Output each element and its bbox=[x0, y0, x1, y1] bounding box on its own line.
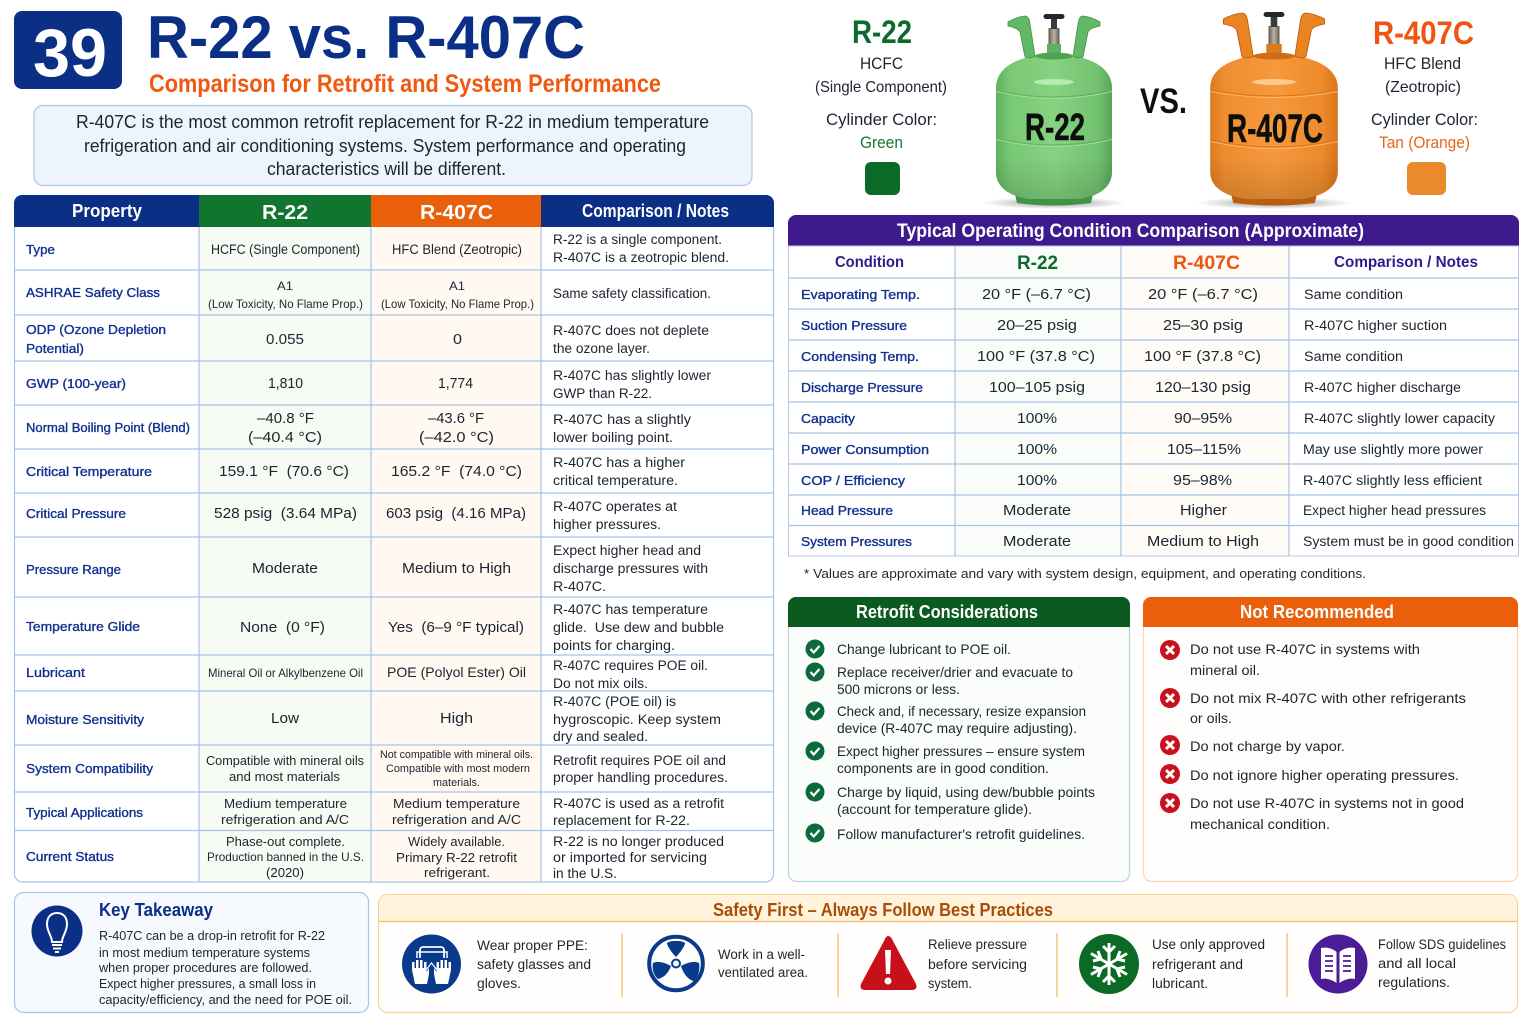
row: Current Status: Phase-out complete. bbox=[226, 834, 345, 849]
row: Typical Applications bbox=[26, 796, 724, 828]
number badge: 39 bbox=[33, 15, 107, 91]
intro callout: R-407C is the most common retrofit replacement for R-22 in medium temperature bbox=[76, 112, 709, 132]
checklist text: Check and, if necessary, resize expansion bbox=[837, 703, 1086, 719]
check icons bbox=[806, 640, 824, 842]
row: Type: HCFC (Single Component) bbox=[211, 242, 360, 257]
R-22 info block bbox=[815, 14, 947, 195]
row: Pressure Range: Pressure Range bbox=[26, 562, 121, 577]
list text: or oils. bbox=[1190, 710, 1232, 726]
row: Temperature Glide: glide. Use dew and bubble bbox=[553, 620, 724, 635]
R-407C info block: (Zeotropic) bbox=[1385, 79, 1461, 96]
row: Lubricant: Lubricant bbox=[26, 665, 85, 680]
row: System Pressures: System Pressures bbox=[801, 534, 913, 549]
list text: Do not ignore higher operating pressures. bbox=[1190, 767, 1459, 783]
row: Critical Pressure: higher pressures. bbox=[553, 517, 661, 532]
row: ODP: Potential) bbox=[26, 341, 84, 356]
row: Power Consumption: 100% bbox=[1017, 442, 1057, 458]
list text: Do not use R-407C in systems with bbox=[1190, 641, 1420, 657]
row: Condensing Temp.: Condensing Temp. bbox=[801, 349, 919, 364]
row: ODP: 0 bbox=[453, 332, 462, 348]
row: Type bbox=[26, 232, 729, 265]
intro callout: characteristics will be different. bbox=[267, 159, 506, 179]
table header: Property bbox=[72, 201, 142, 221]
row: Capacity: Capacity bbox=[801, 411, 856, 426]
R-407C info block: Cylinder Color: bbox=[1371, 111, 1478, 129]
row: Current Status: Widely available. bbox=[408, 834, 505, 849]
row: ODP: the ozone layer. bbox=[553, 341, 650, 356]
row: Moisture Sensitivity: R-407C (POE oil) is bbox=[553, 694, 676, 709]
R-22 info block: Cylinder Color: bbox=[826, 111, 937, 129]
row: Condensing Temp. bbox=[801, 349, 1403, 365]
row: Typical Applications: Typical Applications bbox=[26, 805, 144, 820]
row: GWP: R-407C has slightly lower bbox=[553, 368, 712, 383]
row: COP / Efficiency: 95–98% bbox=[1173, 473, 1232, 489]
text: SDS: regulations. bbox=[1378, 975, 1450, 990]
icon: snowflake bbox=[1079, 934, 1139, 994]
text: PPE: Wear proper PPE: bbox=[477, 938, 588, 953]
row: Type: R-22 is a single component. bbox=[553, 232, 722, 247]
row: ASHRAE Safety Class: A1 bbox=[277, 279, 293, 293]
row: Power Consumption: Power Consumption bbox=[801, 442, 929, 457]
row: Lubricant bbox=[26, 658, 708, 691]
text: ventilation: ventilated area. bbox=[718, 965, 808, 980]
intro callout: refrigeration and air conditioning systems. System performance and operating bbox=[84, 136, 686, 156]
text: PPE: gloves. bbox=[477, 976, 521, 991]
row: Condensing Temp.: 100 °F (37.8 °C) bbox=[977, 349, 1095, 365]
checklist text: 500 microns or less. bbox=[837, 681, 960, 697]
row: Critical Temperature bbox=[26, 455, 686, 488]
body text bbox=[98, 928, 352, 1007]
x icons bbox=[1160, 640, 1180, 813]
text: relieve pressure: Relieve pressure bbox=[928, 937, 1027, 952]
row: System Compatibility: System Compatibility bbox=[26, 761, 154, 776]
icon: PPE glasses and gloves bbox=[402, 934, 461, 994]
row: Head Pressure: Expect higher head pressures bbox=[1303, 503, 1486, 518]
row: Normal Boiling Point: lower boiling point. bbox=[553, 430, 673, 445]
row: Current Status: Primary R-22 retrofit bbox=[396, 850, 517, 865]
row: ASHRAE Safety Class: Same safety classification. bbox=[553, 286, 711, 301]
column headers: R-407C bbox=[1173, 253, 1240, 274]
row: Critical Pressure: 528 psig (3.64 MPa) bbox=[214, 506, 357, 522]
row: Typical Applications: replacement for R-22. bbox=[553, 813, 690, 828]
row: System Pressures: Moderate bbox=[1003, 534, 1071, 550]
row: Power Consumption: 105–115% bbox=[1167, 442, 1241, 458]
row: System Compatibility: Retrofit requires POE oil and bbox=[553, 753, 726, 768]
row: Capacity bbox=[801, 411, 1495, 427]
row: Suction Pressure: 25–30 psig bbox=[1163, 318, 1243, 334]
row: Normal Boiling Point: (–40.4 °C) bbox=[248, 430, 322, 446]
row: Head Pressure: Moderate bbox=[1003, 503, 1071, 519]
panel: operating conditions table bbox=[788, 215, 1519, 556]
panel: not recommended bbox=[1143, 597, 1518, 882]
icon: open book bbox=[1308, 934, 1368, 994]
text: relieve pressure bbox=[928, 937, 1027, 991]
row: Evaporating Temp.: 20 °F (–6.7 °C) bbox=[1148, 287, 1258, 303]
text: approved refrigerant: lubricant. bbox=[1152, 976, 1208, 991]
row: Lubricant: Do not mix oils. bbox=[553, 676, 648, 691]
row: System Pressures: System must be in good condition bbox=[1303, 534, 1514, 549]
body text: in most medium temperature systems bbox=[99, 945, 310, 960]
row: ODP: R-407C does not deplete bbox=[553, 323, 709, 338]
checklist text: Change lubricant to POE oil. bbox=[837, 641, 1011, 657]
checklist text: Charge by liquid, using dew/bubble points bbox=[837, 784, 1095, 800]
R-407C info block: HFC Blend bbox=[1384, 55, 1461, 73]
row: System Pressures bbox=[801, 534, 1514, 550]
row: Pressure Range bbox=[26, 543, 708, 594]
VS. label: VS. bbox=[1140, 82, 1187, 121]
intro callout bbox=[34, 106, 752, 186]
text: approved refrigerant: Use only approved bbox=[1152, 937, 1265, 952]
R-22 info block: HCFC bbox=[860, 55, 903, 73]
icon: light bulb bbox=[32, 906, 82, 956]
row: Current Status: Current Status bbox=[26, 849, 115, 864]
row: Pressure Range: discharge pressures with bbox=[553, 561, 708, 576]
checklist text: (account for temperature glide). bbox=[837, 801, 1032, 817]
R-22 info block: Green bbox=[860, 134, 903, 152]
row: Discharge Pressure: 120–130 psig bbox=[1155, 380, 1251, 396]
list text: Do not charge by vapor. bbox=[1190, 738, 1345, 754]
panel: property comparison table bbox=[14, 195, 774, 882]
title: R-22 vs. R-407C bbox=[147, 4, 585, 71]
row: Typical Applications: R-407C is used as a retrofit bbox=[553, 796, 724, 811]
row: Capacity: 100% bbox=[1017, 411, 1057, 427]
row: Suction Pressure bbox=[801, 318, 1447, 334]
body text: Expect higher pressures, a small loss in bbox=[99, 976, 316, 991]
text: ventilation: Work in a well- bbox=[718, 947, 805, 962]
row: Temperature Glide: points for charging. bbox=[553, 638, 675, 653]
checklist text bbox=[837, 641, 1095, 842]
text: approved refrigerant bbox=[1152, 937, 1265, 991]
row: ODP: ODP (Ozone Depletion bbox=[26, 322, 166, 337]
row: ASHRAE Safety Class: A1 bbox=[449, 279, 465, 293]
icon: ventilation fan bbox=[649, 937, 703, 990]
row: COP / Efficiency: COP / Efficiency bbox=[801, 473, 906, 488]
row: Pressure Range: R-407C. bbox=[553, 579, 606, 594]
list text: Do not use R-407C in systems not in good bbox=[1190, 795, 1464, 811]
row: Evaporating Temp.: Same condition bbox=[1304, 287, 1403, 302]
row: Head Pressure: Head Pressure bbox=[801, 503, 893, 518]
row: GWP: GWP (100-year) bbox=[26, 376, 126, 391]
checklist text: Follow manufacturer's retrofit guidelines. bbox=[837, 826, 1085, 842]
row: Current Status: refrigerant. bbox=[424, 865, 490, 880]
row: Type: R-407C is a zeotropic blend. bbox=[553, 250, 729, 265]
row: ODP bbox=[26, 322, 709, 356]
row: GWP bbox=[26, 368, 712, 401]
row: Current Status bbox=[26, 834, 724, 881]
row: Moisture Sensitivity: dry and sealed. bbox=[553, 729, 648, 744]
row: Discharge Pressure: R-407C higher discharge bbox=[1304, 380, 1461, 395]
row: Critical Pressure: R-407C operates at bbox=[553, 499, 677, 514]
row: Suction Pressure: 20–25 psig bbox=[997, 318, 1077, 334]
row: Pressure Range: Medium to High bbox=[402, 561, 511, 577]
row: COP / Efficiency: 100% bbox=[1017, 473, 1057, 489]
row: GWP: 1,810 bbox=[268, 376, 303, 392]
text: approved refrigerant: refrigerant and bbox=[1152, 957, 1243, 972]
row: Critical Temperature: R-407C has a higher bbox=[553, 455, 686, 470]
text: relieve pressure: before servicing bbox=[928, 957, 1027, 972]
text: SDS: and all local bbox=[1378, 956, 1456, 971]
row: Evaporating Temp.: 20 °F (–6.7 °C) bbox=[982, 287, 1091, 303]
row: Power Consumption: May use slightly more power bbox=[1303, 442, 1484, 457]
row: Lubricant: Mineral Oil or Alkylbenzene Oil bbox=[208, 666, 363, 680]
row: Normal Boiling Point: –40.8 °F bbox=[257, 411, 314, 427]
row: COP / Efficiency: R-407C slightly less efficient bbox=[1303, 473, 1482, 488]
table header: R-407C bbox=[420, 202, 493, 224]
table header bbox=[14, 195, 774, 227]
subtitle: Comparison for Retrofit and System Performance bbox=[149, 70, 661, 98]
heading: Retrofit Considerations bbox=[856, 602, 1038, 622]
row: Normal Boiling Point bbox=[26, 411, 691, 446]
row: COP / Efficiency bbox=[801, 473, 1482, 489]
row: Moisture Sensitivity bbox=[26, 694, 721, 744]
row: Capacity: R-407C slightly lower capacity bbox=[1304, 411, 1495, 426]
row: Critical Pressure: 603 psig (4.16 MPa) bbox=[386, 506, 526, 522]
row: Temperature Glide: None (0 °F) bbox=[240, 620, 325, 636]
text: PPE bbox=[477, 938, 591, 991]
row: Lubricant: R-407C requires POE oil. bbox=[553, 658, 708, 673]
row: Temperature Glide: Temperature Glide bbox=[26, 619, 140, 634]
checklist text: Replace receiver/drier and evacuate to bbox=[837, 664, 1073, 680]
panel: safety first bbox=[378, 894, 1518, 1012]
row: System Compatibility bbox=[26, 749, 728, 789]
R-22 info block: (Single Component) bbox=[815, 79, 947, 96]
row: Typical Applications: refrigeration and A/C bbox=[221, 812, 349, 827]
row: System Compatibility: proper handling procedures. bbox=[553, 770, 728, 785]
R-407C info block: Tan (Orange) bbox=[1379, 134, 1470, 152]
table header: Comparison / Notes bbox=[582, 201, 729, 221]
row: Temperature Glide: Yes (6–9 °F typical) bbox=[388, 620, 524, 636]
list text bbox=[1190, 641, 1466, 832]
row: Typical Applications: refrigeration and A/C bbox=[392, 812, 521, 827]
panel: key takeaway bbox=[14, 892, 368, 1012]
row: System Pressures: Medium to High bbox=[1147, 534, 1259, 550]
row: Discharge Pressure bbox=[801, 380, 1461, 396]
row: Normal Boiling Point: (–42.0 °C) bbox=[419, 430, 494, 446]
heading: Safety First – Always Follow Best Practices bbox=[713, 900, 1053, 920]
row: Critical Pressure bbox=[26, 499, 677, 532]
body text: capacity/efficiency, and the need for POE oil. bbox=[99, 992, 352, 1007]
row: Evaporating Temp. bbox=[801, 287, 1403, 303]
heading: Key Takeaway bbox=[99, 900, 213, 920]
row: System Compatibility: and most materials bbox=[229, 769, 340, 784]
row: Type: Type bbox=[26, 242, 55, 257]
column headers: R-22 bbox=[1017, 253, 1058, 274]
row: System Compatibility: Compatible with mineral oils bbox=[206, 753, 364, 768]
text: PPE: safety glasses and bbox=[477, 957, 591, 972]
row: Current Status: in the U.S. bbox=[553, 866, 617, 881]
row: Current Status: (2020) bbox=[266, 865, 304, 880]
checklist text: Expect higher pressures – ensure system bbox=[837, 743, 1085, 759]
row: Moisture Sensitivity: Moisture Sensitivity bbox=[26, 712, 145, 727]
row: ASHRAE Safety Class: ASHRAE Safety Class bbox=[26, 285, 161, 300]
column headers: Condition bbox=[835, 254, 904, 271]
row: Lubricant: POE (Polyol Ester) Oil bbox=[387, 664, 526, 680]
row: Temperature Glide bbox=[26, 602, 724, 653]
row: Condensing Temp.: Same condition bbox=[1304, 349, 1403, 364]
swatch: tan orange bbox=[1407, 162, 1446, 195]
row: System Compatibility: Not compatible with mineral oils. bbox=[380, 749, 533, 761]
R-407C info block: R-407C bbox=[1373, 15, 1474, 51]
row: Moisture Sensitivity: High bbox=[440, 711, 473, 727]
row: GWP: GWP than R-22. bbox=[553, 386, 652, 401]
row: Type: HFC Blend (Zeotropic) bbox=[392, 242, 522, 257]
row: ASHRAE Safety Class: (Low Toxicity, No Flame Prop.) bbox=[208, 297, 363, 311]
text: relieve pressure: system. bbox=[928, 976, 972, 991]
list text: Do not mix R-407C with other refrigerants bbox=[1190, 690, 1466, 706]
number badge bbox=[14, 11, 122, 91]
row: Suction Pressure: Suction Pressure bbox=[801, 318, 907, 333]
row: Discharge Pressure: 100–105 psig bbox=[989, 380, 1085, 396]
row: Head Pressure bbox=[801, 503, 1486, 519]
row: System Compatibility: Compatible with most modern bbox=[386, 763, 530, 775]
list text: mechanical condition. bbox=[1190, 816, 1330, 832]
row: Critical Temperature: critical temperature. bbox=[553, 473, 678, 488]
row: ASHRAE Safety Class bbox=[26, 279, 711, 311]
footnote: * Values are approximate and vary with system design, equipment, and operating conditions. bbox=[804, 566, 1366, 581]
row: Moisture Sensitivity: hygroscopic. Keep system bbox=[553, 712, 721, 727]
row: Critical Temperature: 159.1 °F (70.6 °C) bbox=[219, 464, 349, 480]
body text: R-407C can be a drop-in retrofit for R-22 bbox=[99, 928, 325, 943]
list text: mineral oil. bbox=[1190, 662, 1260, 678]
row: Pressure Range: Moderate bbox=[252, 561, 318, 577]
row: ASHRAE Safety Class: (Low Toxicity, No Flame Prop.) bbox=[381, 297, 534, 311]
checklist text: components are in good condition. bbox=[837, 760, 1049, 776]
row: Critical Temperature: Critical Temperature bbox=[26, 464, 152, 479]
swatch: green bbox=[865, 162, 900, 195]
column headers bbox=[835, 253, 1478, 274]
row: Current Status: R-22 is no longer produced bbox=[553, 834, 724, 849]
cylinder label: R-22 bbox=[1025, 107, 1085, 149]
body text: when proper procedures are followed. bbox=[98, 960, 312, 975]
row: Critical Temperature: 165.2 °F (74.0 °C) bbox=[391, 464, 522, 480]
table header: R-22 bbox=[262, 202, 308, 224]
R-22 info block: R-22 bbox=[852, 14, 912, 50]
row: Normal Boiling Point: Normal Boiling Point (Blend) bbox=[26, 420, 190, 435]
cylinder label: R-407C bbox=[1227, 107, 1323, 151]
row: Evaporating Temp.: Evaporating Temp. bbox=[801, 287, 920, 302]
table title: Typical Operating Condition Comparison (Approximate) bbox=[897, 221, 1364, 242]
icon: warning triangle bbox=[860, 936, 916, 990]
row: Current Status: or imported for servicing bbox=[553, 850, 707, 865]
row: Head Pressure: Higher bbox=[1180, 503, 1227, 519]
text: ventilation bbox=[718, 947, 808, 980]
row: System Compatibility: materials. bbox=[433, 777, 480, 789]
row: Temperature Glide: R-407C has temperature bbox=[553, 602, 708, 617]
row: Normal Boiling Point: R-407C has a slightly bbox=[553, 412, 691, 427]
row: Typical Applications: Medium temperature bbox=[224, 796, 347, 811]
text: SDS: Follow SDS guidelines bbox=[1378, 937, 1506, 952]
row: Discharge Pressure: Discharge Pressure bbox=[801, 380, 923, 395]
row: Pressure Range: Expect higher head and bbox=[553, 543, 701, 558]
panel: retrofit considerations bbox=[788, 597, 1130, 882]
row: ODP: 0.055 bbox=[266, 332, 304, 348]
row: Suction Pressure: R-407C higher suction bbox=[1304, 318, 1447, 333]
cylinder: R-22 green bbox=[982, 14, 1126, 209]
row: Normal Boiling Point: –43.6 °F bbox=[428, 411, 484, 427]
row: Power Consumption bbox=[801, 442, 1484, 458]
row: Condensing Temp.: 100 °F (37.8 °C) bbox=[1144, 349, 1261, 365]
R-407C info block bbox=[1371, 15, 1478, 195]
row: Capacity: 90–95% bbox=[1174, 411, 1232, 427]
row: Typical Applications: Medium temperature bbox=[393, 796, 520, 811]
checklist text: device (R-407C may require adjusting). bbox=[837, 720, 1077, 736]
row: Critical Pressure: Critical Pressure bbox=[26, 506, 126, 521]
row: Current Status: Production banned in the U.S. bbox=[207, 850, 364, 864]
row: GWP: 1,774 bbox=[438, 376, 473, 392]
heading: Not Recommended bbox=[1240, 602, 1394, 622]
text: SDS bbox=[1378, 937, 1506, 990]
row: Moisture Sensitivity: Low bbox=[271, 711, 300, 727]
column headers: Comparison / Notes bbox=[1334, 254, 1478, 271]
cylinder: R-407C orange bbox=[1196, 12, 1352, 209]
